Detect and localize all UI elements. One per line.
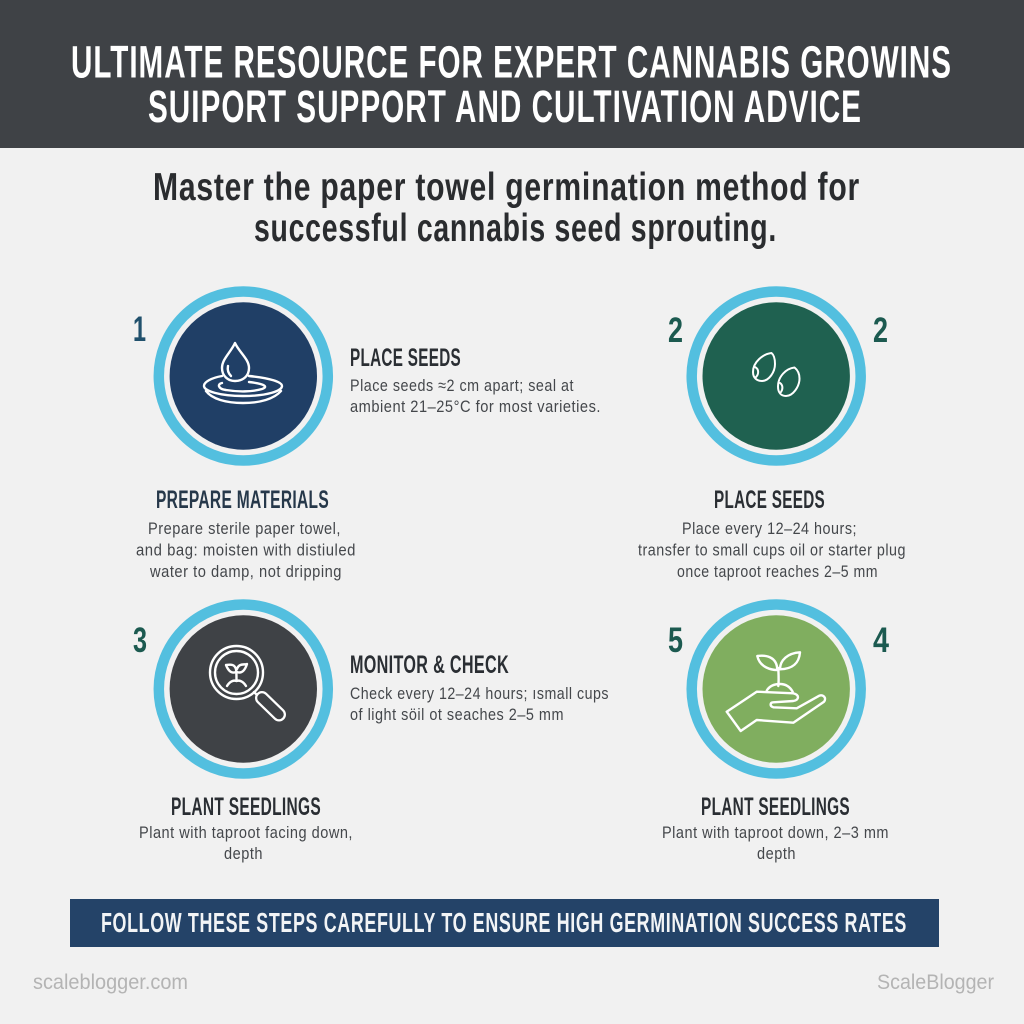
step 2 text: place seeds: PLACE SEEDS [714, 486, 825, 514]
step 3 side text: monitor and check: of light söil ot seaches 2–5 mm [350, 705, 564, 724]
step 3 side text: monitor and check: Check every 12–24 hours; ısmall cups [350, 684, 609, 703]
step 1 number: 1 [133, 310, 146, 349]
step 1 badge: water drop [159, 292, 328, 460]
header banner [0, 0, 1024, 148]
step 2 text: place seeds: Place every 12–24 hours; [682, 519, 857, 538]
step 2 number left: 2 [668, 311, 683, 350]
bottom callout banner [70, 899, 939, 947]
step 1 text: prepare materials: and bag: moisten with distiuled [136, 540, 356, 560]
step 4 right number: 4 [873, 621, 889, 660]
step 1 side text: place seeds [350, 344, 601, 416]
step 1 side text: place seeds: ambient 21–25°C for most varieties. [350, 397, 601, 416]
step 4 text: plant seedlings: Plant with taproot down, 2–3 mm [662, 823, 889, 842]
step 2 text: place seeds: transfer to small cups oil or starter plug [638, 540, 906, 560]
step 1 text: prepare materials [136, 486, 356, 581]
step 2 badge: seeds [692, 292, 861, 460]
subtitle [153, 166, 860, 250]
step 2 number right: 2 [873, 311, 888, 350]
step 1 side text: place seeds: PLACE SEEDS [350, 344, 461, 372]
step 1 text: prepare materials: water to damp, not dripping [149, 562, 342, 581]
step 1 side text: place seeds: Place seeds ≈2 cm apart; seal at [350, 376, 574, 395]
step 4 badge: hand with seedling [692, 604, 861, 774]
step 2 text: place seeds [638, 486, 906, 581]
step 3 side text: monitor and check: MONITOR & CHECK [350, 651, 509, 679]
step 3 text: plant seedlings: depth [224, 844, 263, 863]
step 3 text: plant seedlings [139, 793, 353, 863]
step 2 text: place seeds: once taproot reaches 2–5 mm [677, 562, 878, 581]
step 4 text: plant seedlings [662, 793, 889, 863]
step 3 number: 3 [133, 621, 147, 660]
step 3 side text: monitor and check [350, 651, 609, 724]
step 4 left number: 5 [668, 621, 683, 660]
footer url: scaleblogger.com [33, 971, 188, 994]
step 3 badge: magnifying glass [159, 604, 328, 774]
step 4 text: plant seedlings: PLANT SEEDLINGS [701, 793, 850, 821]
footer brand: ScaleBlogger [877, 971, 994, 994]
subtitle: successful cannabis seed sprouting. [254, 207, 777, 250]
step 4 text: plant seedlings: depth [757, 844, 796, 863]
step 3 text: plant seedlings: PLANT SEEDLINGS [171, 793, 321, 821]
step 3 text: plant seedlings: Plant with taproot facing down, [139, 823, 353, 842]
step 1 text: prepare materials: PREPARE MATERIALS [156, 486, 329, 514]
step 1 text: prepare materials: Prepare sterile paper towel, [148, 519, 341, 538]
